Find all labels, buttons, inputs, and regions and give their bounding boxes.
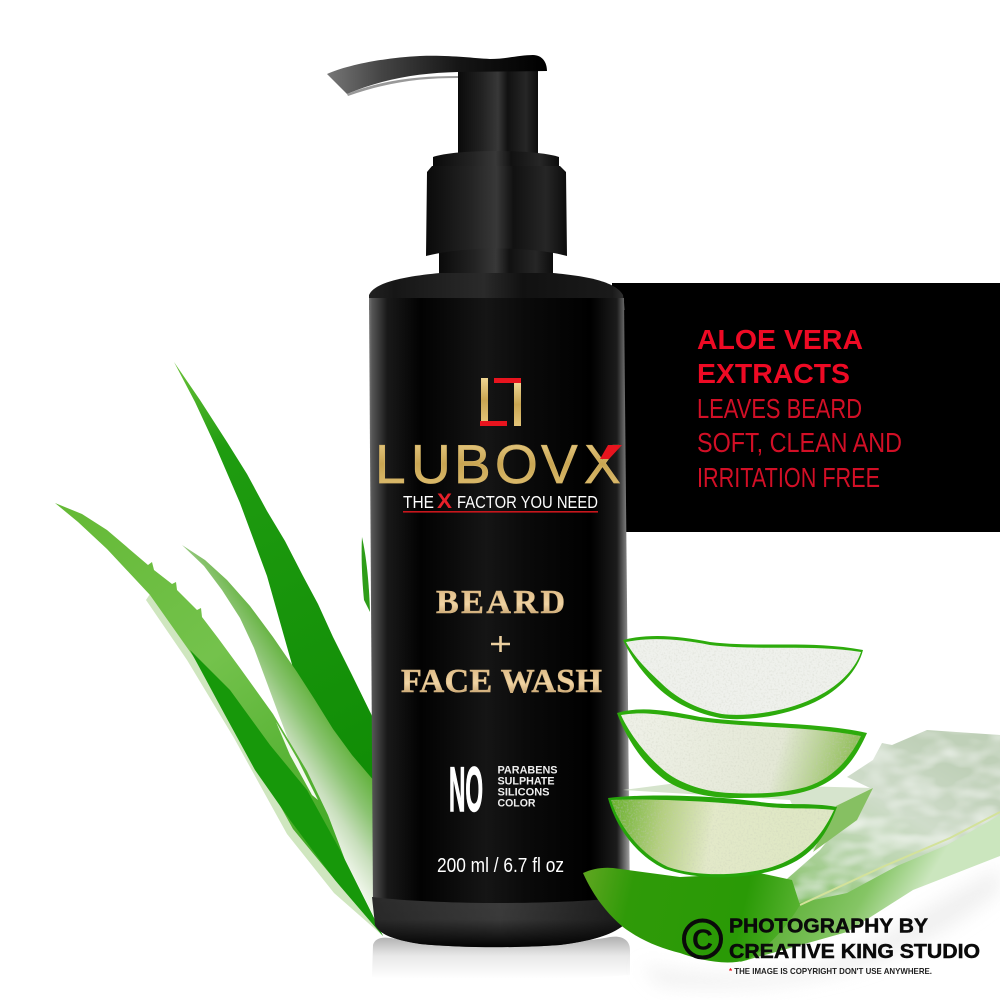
base shading	[372, 897, 628, 947]
nozzle highlight	[347, 76, 458, 96]
leaf lower side	[740, 815, 1000, 962]
icon: copyright symbol: C	[692, 924, 713, 956]
pump collar	[433, 151, 559, 172]
tagline: X	[437, 490, 452, 513]
callout text: SOFT, CLEAN AND	[697, 427, 902, 458]
slice outer	[608, 795, 837, 877]
free-from list	[498, 764, 558, 810]
callout text	[697, 324, 902, 493]
pump cap	[426, 166, 567, 256]
credit text: PHOTOGRAPHY BY	[729, 914, 928, 938]
leaf top surface	[780, 730, 1000, 915]
bottle shoulder	[369, 273, 625, 310]
aloe slice: top	[623, 636, 863, 719]
callout text: IRRITATION FREE	[697, 462, 880, 493]
left long leaf pale lower edge	[146, 594, 383, 936]
dark rib of left leaf	[190, 650, 383, 936]
credit text: CREATIVE KING STUDIO	[729, 940, 980, 963]
product name: beard: BEARD	[436, 584, 565, 621]
slice outer	[623, 636, 863, 719]
copyright note: * THE IMAGE IS COPYRIGHT DON'T USE ANYWHERE.	[729, 966, 932, 976]
leaf cut face	[583, 868, 800, 962]
product bottle	[327, 55, 630, 947]
tagline: FACTOR YOU NEED	[457, 492, 598, 512]
callout text: EXTRACTS	[697, 358, 850, 389]
free-from list: PARABENS	[498, 764, 558, 776]
wedge green side	[813, 788, 873, 852]
free-from list: COLOR	[498, 798, 536, 810]
light green middle leaf	[182, 545, 378, 925]
slice outer	[617, 709, 867, 798]
icon: copyright symbol	[684, 920, 721, 958]
bottle body	[369, 298, 630, 906]
volume: 200 ml / 6.7 fl oz	[437, 855, 564, 877]
bottle reflection	[372, 937, 630, 979]
bottle base	[372, 897, 628, 947]
photography credit	[684, 914, 980, 976]
panel: black callout background	[612, 283, 1000, 532]
product bottle: NO	[449, 755, 483, 825]
tagline: THE	[403, 492, 434, 512]
callout text: ALOE VERA	[697, 324, 863, 355]
logo icon	[480, 378, 521, 426]
aloe slice: bottom	[608, 795, 837, 877]
pump nozzle	[327, 55, 547, 94]
left long leaf	[55, 503, 383, 936]
aloe leaf shadow	[640, 868, 1000, 988]
dark green leaf	[174, 362, 375, 790]
brand name: LUBOVX	[375, 433, 621, 495]
free-from list: SULPHATE	[498, 776, 554, 788]
tagline	[403, 490, 598, 513]
slice flesh	[621, 713, 861, 793]
free-from list: SILICONS	[498, 786, 550, 798]
pump stem	[458, 68, 538, 153]
small leaf behind bottle	[362, 537, 370, 612]
bottle neck	[439, 240, 553, 276]
callout text: LEAVES BEARD	[697, 393, 862, 424]
long cut aloe leaf	[583, 730, 1000, 962]
credit text	[729, 914, 980, 963]
slice flesh	[626, 639, 861, 715]
highlight between leaves	[276, 722, 318, 800]
aloe leaves, left	[55, 362, 383, 936]
slice flesh	[611, 799, 834, 874]
product name: face wash: FACE WASH	[401, 663, 602, 700]
pale rib line	[800, 812, 1000, 905]
cut leaf wedge	[623, 783, 873, 850]
logo red accent	[600, 445, 622, 459]
tagline underline	[403, 511, 598, 513]
plus sign	[491, 636, 510, 652]
aloe slice: middle	[617, 709, 867, 798]
